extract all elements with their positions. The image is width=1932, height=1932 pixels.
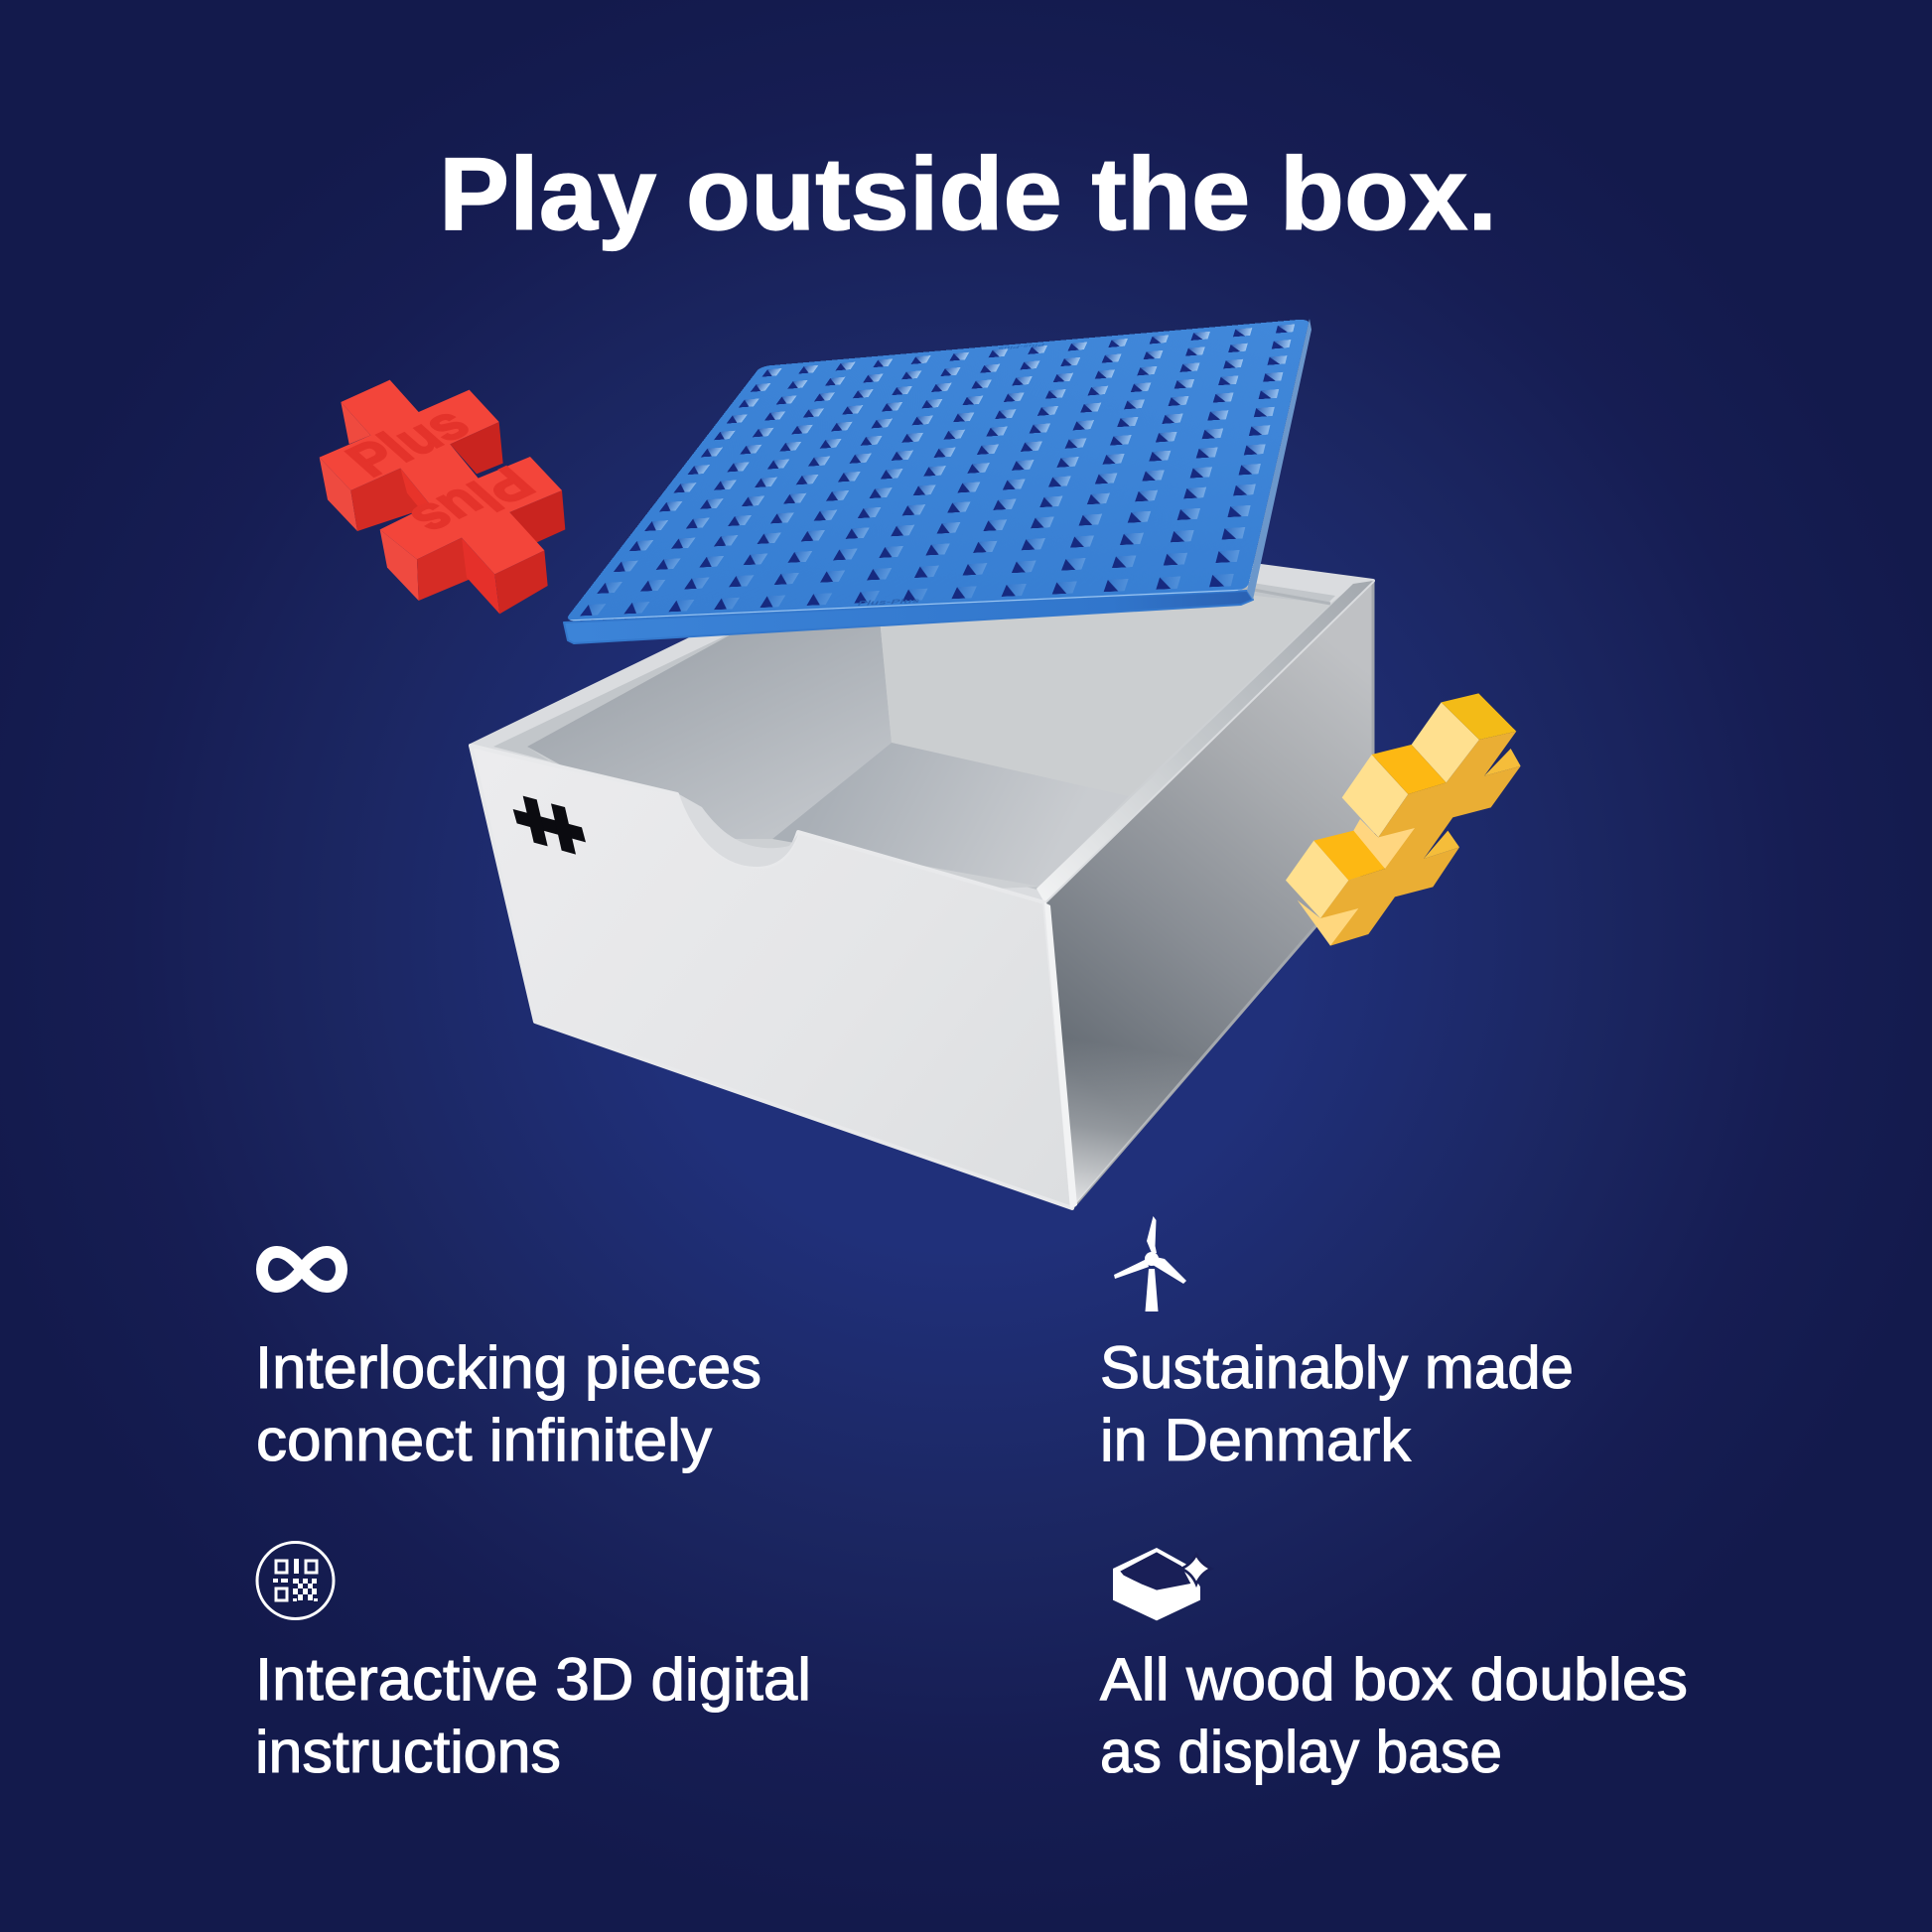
yellow interlocking piece: [1286, 693, 1521, 946]
box interior: [527, 556, 1353, 898]
red piece top face: [320, 380, 562, 574]
yellow upper wing: [1484, 749, 1521, 776]
feature: interlocking pieces: [255, 1252, 761, 1473]
interior left wall: [527, 556, 892, 839]
text: wood box display base: All wood box doubles: [1100, 1646, 1688, 1713]
text: interactive instructions: instructions: [255, 1719, 561, 1785]
feature: sustainably made: [1100, 1216, 1574, 1473]
text: interlocking pieces: Interlocking pieces: [255, 1334, 761, 1401]
blue studded lid top: Plus-Plus: [649, 451, 696, 461]
text: sustainably made: in Denmark: [1100, 1407, 1412, 1473]
back rim groove line: [1231, 586, 1330, 604]
yellow inner light notch: [1353, 819, 1415, 869]
text: sustainably made: Sustainably made: [1100, 1334, 1574, 1401]
rim groove: [493, 534, 1335, 891]
text: interlocking pieces: connect infinitely: [256, 1407, 712, 1473]
red interlocking piece: [320, 380, 565, 614]
embossed word Plus: Plus: [333, 397, 483, 486]
yellow lower block top: [1313, 831, 1385, 881]
yellow bottom block: [1298, 900, 1358, 946]
feature: wood box display base: [1100, 1548, 1688, 1785]
yellow lower block light face: [1286, 841, 1348, 918]
feature: interactive instructions: [255, 1543, 811, 1785]
icon: box with sparkle: [1113, 1548, 1211, 1620]
text: wood box display base: as display base: [1100, 1719, 1502, 1785]
storage box: [471, 522, 1373, 1209]
box front face: [471, 746, 1072, 1208]
yellow middle block light face: [1342, 755, 1408, 837]
interior back wall: [874, 556, 1330, 796]
text: interactive instructions: Interactive 3D digital: [255, 1646, 811, 1713]
box right outer face: [1044, 581, 1373, 1208]
box vertical corner highlight: [1044, 902, 1077, 1209]
interior floor: [772, 743, 1129, 887]
notch lip: [679, 794, 798, 867]
right rim band: [1036, 581, 1373, 902]
blue studded lid top: Plus-Plus: [953, 327, 997, 336]
red piece side faces: [320, 402, 565, 614]
yellow piece body: [1320, 732, 1521, 946]
title: Play outside the box.: [439, 137, 1497, 252]
icon: black brand mark: [513, 796, 586, 855]
icon: wind turbine: [1114, 1216, 1186, 1311]
yellow upper block top: [1442, 693, 1516, 740]
embossed word Plus inverted: Plus: [398, 457, 547, 546]
yellow upper block light face: [1412, 702, 1479, 782]
yellow middle block top: [1372, 745, 1447, 794]
yellow lower wing: [1424, 831, 1459, 859]
box top rim: [471, 522, 1373, 902]
blue studded lid top: [568, 320, 1309, 621]
icon: infinity: [262, 1252, 342, 1287]
lid underside rim: [564, 319, 1311, 643]
icon: QR code in circle: [257, 1543, 334, 1618]
